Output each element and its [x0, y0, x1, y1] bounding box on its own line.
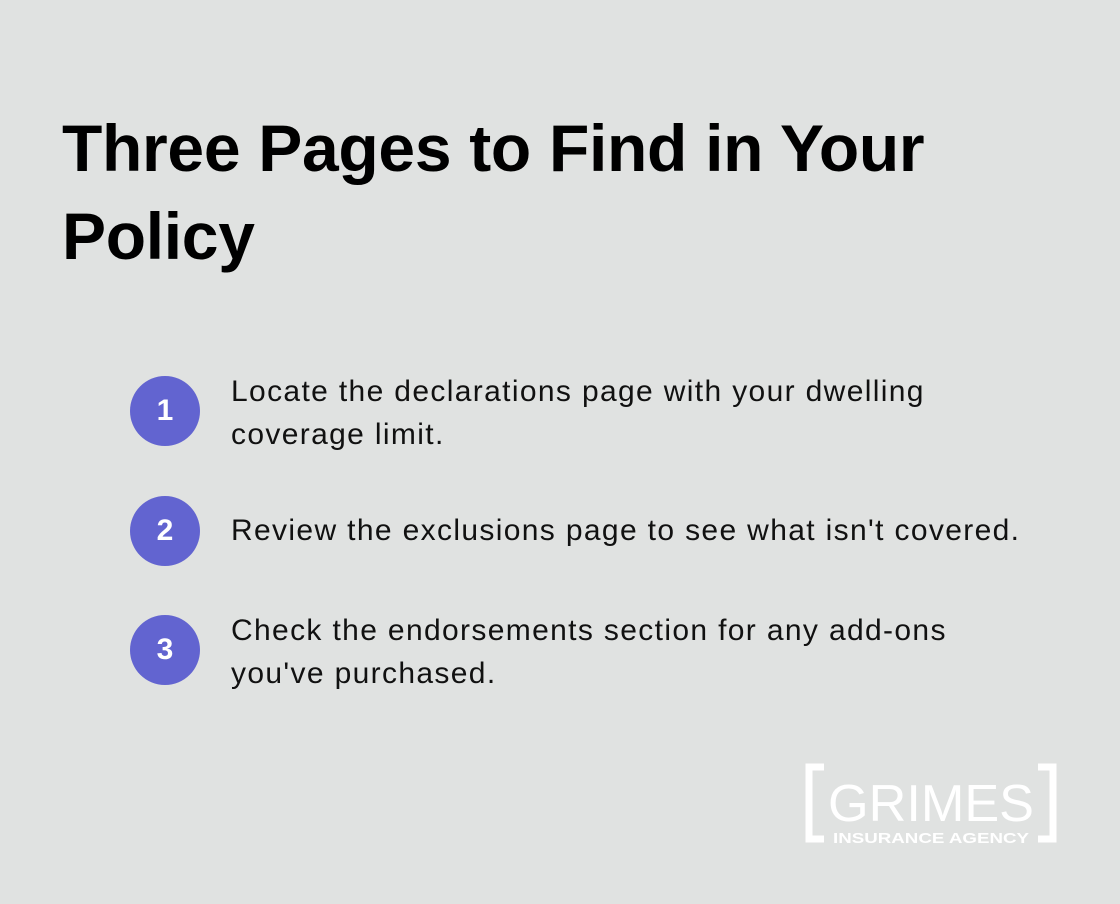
step 2 text: Review the exclusions page to see what isn't covered. — [231, 514, 1020, 547]
step 1 number — [130, 376, 200, 446]
logo — [806, 764, 1056, 847]
step 3 text — [231, 614, 947, 690]
step 3 text: Check the endorsements section for any add-ons — [231, 614, 947, 647]
step 1 number: 1 — [157, 394, 173, 427]
step 1 text: Locate the declarations page with your dwelling — [231, 375, 925, 408]
step 1 text — [231, 375, 925, 451]
step 3 text: you've purchased. — [231, 657, 496, 690]
logo: GRIMES — [828, 775, 1034, 833]
step 2 number — [130, 496, 200, 566]
logo: INSURANCE AGENCY — [833, 830, 1029, 847]
title: Three Pages to Find in Your Policy — [62, 111, 924, 273]
step 2 — [130, 496, 1020, 566]
step 3 number: 3 — [157, 633, 173, 666]
step 1 text: coverage limit. — [231, 418, 445, 451]
step 3 number — [130, 615, 200, 685]
step 1 — [130, 375, 925, 451]
step 3 — [130, 614, 947, 690]
step 2 number: 2 — [157, 514, 173, 547]
